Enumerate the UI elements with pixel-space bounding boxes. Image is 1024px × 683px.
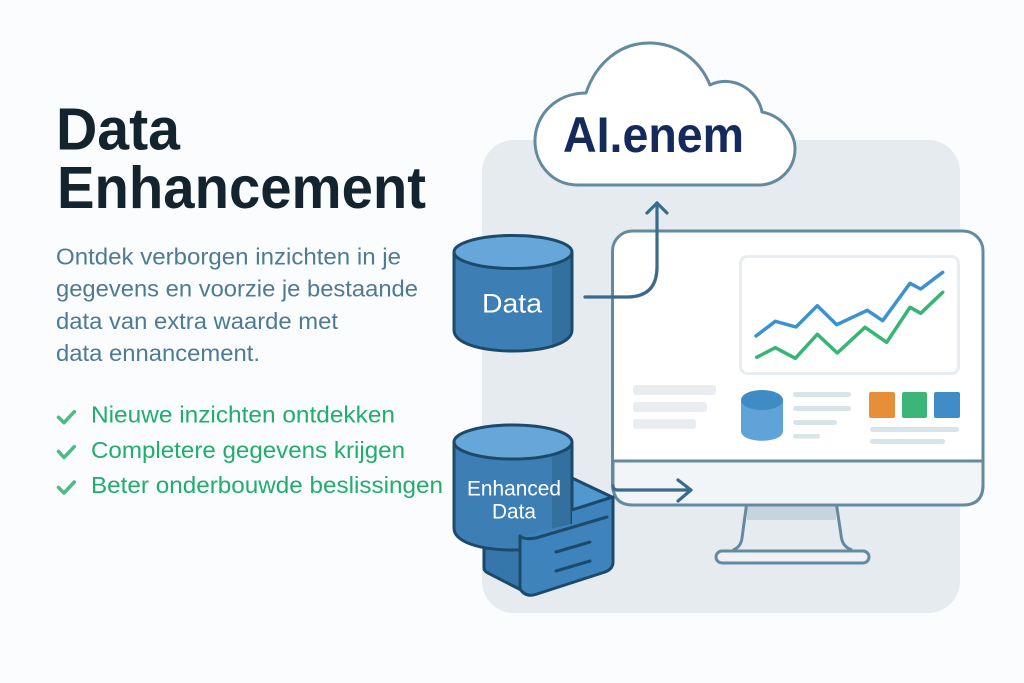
cloud: AI.enem [563, 107, 744, 163]
item: completere gegevens: Completere gegevens krijgen [91, 437, 405, 463]
monitor body [612, 231, 983, 505]
arrow: data to cloud [585, 203, 667, 297]
description text: Ontdek verborgen inzichten in je [56, 243, 401, 269]
description text: gegevens en voorzie je bestaande [56, 276, 418, 302]
placeholder text lines left [633, 385, 716, 429]
placeholder text lines right [870, 427, 959, 444]
title: Data [56, 96, 181, 162]
monitor [612, 231, 983, 563]
item: nieuwe inzichten: Nieuwe inzichten ontdekken [91, 402, 395, 428]
description text: data van extra waarde met [56, 308, 339, 334]
title [56, 96, 426, 221]
database: Data: Data [482, 288, 543, 318]
label: Enhanced Data: Enhanced [467, 478, 561, 500]
description text [56, 243, 418, 366]
folder back [484, 477, 572, 592]
folder front [520, 497, 613, 595]
item: beter onderbouwde: Beter onderbouwde beslissingen [91, 472, 443, 498]
placeholder text lines middle [793, 392, 851, 438]
monitor bottom bezel [613, 461, 983, 505]
line chart [740, 256, 958, 374]
label: Enhanced Data: Data [492, 500, 536, 524]
database: Data [454, 236, 572, 351]
cloud [535, 43, 795, 185]
colour swatches [869, 392, 960, 418]
title: Enhancement [57, 155, 426, 221]
checklist [58, 402, 443, 498]
database and folder: Enhanced Data [454, 425, 613, 595]
monitor stand [716, 505, 869, 563]
description text: data ennancement. [56, 340, 260, 366]
small database icon [741, 390, 783, 441]
arrow: enhanced data to monitor [613, 480, 691, 501]
database cylinder [454, 425, 572, 550]
label: Enhanced Data [467, 478, 561, 524]
background panel [482, 140, 960, 613]
